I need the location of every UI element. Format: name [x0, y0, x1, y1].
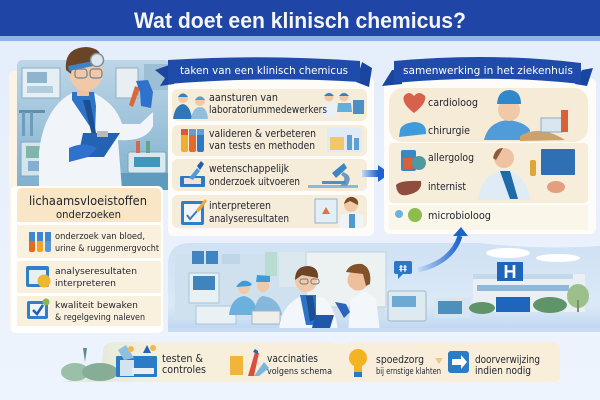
- icon: liver: [396, 181, 421, 195]
- icon: team left: [173, 93, 208, 119]
- icon: quality checkbox: [27, 298, 50, 319]
- panel: taken van een klinisch chemicus: [155, 57, 374, 236]
- row: microbioloog: microbioloog: [428, 210, 491, 222]
- icon: lab analyser: [388, 291, 470, 321]
- title banner: [0, 0, 600, 41]
- icon: checklist clipboard: [181, 199, 207, 225]
- item: testen en controles: testen &: [162, 353, 203, 365]
- heading: lichaamsvloeistoffen onderzoeken: [11, 186, 163, 333]
- row: microbioloog: [389, 205, 588, 230]
- row: aansturen: aansturen van: [209, 92, 278, 104]
- icon: surgeon: [484, 90, 568, 141]
- ribbon heading: samenwerking in het ziekenhuis: [403, 64, 573, 77]
- row: interpreteren: analyseresultaten: [209, 213, 289, 225]
- item: spoedzorg: bij ernstige klahten: [376, 367, 441, 377]
- icon: surgical cap: [399, 122, 426, 137]
- section: allergoloog and internist: internist: [428, 181, 466, 193]
- row: kwaliteit bewaken: & regelgeving naleven: [55, 313, 145, 323]
- item: testen en controles: controles: [162, 364, 206, 376]
- icon: pipette and slide: [180, 161, 205, 187]
- icon: small down marker: [435, 358, 443, 364]
- row: aansturen: laboratoriummedewerkers: [209, 104, 327, 116]
- item: vaccinaties: vaccinaties: [267, 353, 318, 365]
- icon: light bulb: [349, 349, 367, 377]
- icon: team right: [322, 92, 364, 117]
- item: doorverwijzing: [448, 351, 540, 377]
- item: doorverwijzing: indien nodig: [475, 365, 531, 377]
- icon: test tubes: [29, 232, 51, 252]
- row: wetenschappelijk: [172, 159, 367, 191]
- icon: two doctors talking: [279, 264, 380, 332]
- item: vaccinaties: volgens schema: [267, 367, 332, 377]
- ribbon heading: [382, 57, 593, 86]
- arrow: curved to samenwerking: [418, 227, 468, 270]
- row: analyseresultaten interpreteren: interpreteren: [55, 279, 116, 289]
- panel: bottom services bar: [60, 342, 560, 382]
- icon: report with badge: [26, 266, 50, 288]
- section: allergoloog and internist: [389, 143, 588, 203]
- icon: chemist figure: [39, 47, 153, 190]
- panel: hospital scene: [168, 243, 600, 332]
- icon: vaccine and syringe: [230, 349, 269, 376]
- row: interpreteren: interpreteren: [209, 200, 271, 212]
- heading: lichaamsvloeistoffen onderzoeken: onderzoeken: [56, 209, 121, 221]
- icon: validation chart: [327, 128, 362, 152]
- lab shelves and equipment: [175, 251, 386, 324]
- icon: plants: [61, 348, 118, 381]
- ribbon heading: taken van een klinisch chemicus: [180, 64, 348, 77]
- arrow: taken to samenwerking: [362, 165, 390, 182]
- panel: clinical chemist and body fluids: [9, 47, 170, 333]
- title banner: Wat doet een klinisch chemicus?: [134, 8, 466, 33]
- section: allergoloog and internist: allergolog: [428, 152, 474, 164]
- row: valideren: van tests en methoden: [209, 140, 315, 152]
- row: valideren: valideren & verbeteren: [209, 128, 316, 140]
- row: wetenschappelijk: onderzoek uitvoeren: [209, 176, 300, 188]
- item: doorverwijzing: doorverwijzing: [475, 354, 540, 366]
- row: valideren: [172, 125, 367, 156]
- row: onderzoek van bloed: [17, 225, 161, 258]
- row: aansturen: [172, 89, 367, 121]
- icon: speech badge: ‡‡: [399, 264, 407, 273]
- item: testen en controles: [116, 345, 206, 377]
- icon: internist: [478, 148, 575, 200]
- icon: speech badge: [394, 261, 412, 279]
- lab background equipment: [19, 64, 168, 190]
- row: interpreteren: [172, 195, 367, 228]
- ribbon heading: [155, 57, 372, 87]
- item: spoedzorg: spoedzorg: [376, 354, 424, 366]
- row: kwaliteit bewaken: [17, 296, 161, 326]
- section: cardioloog and chirurgie: cardioloog: [428, 97, 478, 109]
- row: onderzoek van bloed: urine & ruggenmergvocht: [55, 244, 159, 254]
- row: analyseresultaten interpreteren: [17, 261, 161, 293]
- row: onderzoek van bloed: onderzoek van bloed,: [55, 232, 145, 242]
- icon: microscope: [308, 163, 358, 188]
- row: analyseresultaten interpreteren: analyseresultaten: [55, 267, 137, 277]
- icon: hospital building: H: [504, 262, 516, 282]
- icon: hospital building: [469, 248, 589, 314]
- item: vaccinaties: [230, 349, 332, 377]
- section: cardioloog and chirurgie: chirurgie: [428, 125, 470, 137]
- icon: coloured tubes: [181, 129, 204, 152]
- icon: allergen jar: [401, 150, 426, 171]
- icon: scientist reading results: [315, 197, 364, 228]
- icon: two lab technicians: [229, 275, 282, 324]
- row: kwaliteit bewaken: kwaliteit bewaken: [55, 301, 138, 311]
- item: spoedzorg: [349, 349, 443, 377]
- panel: samenwerking in het ziekenhuis: [382, 57, 596, 234]
- row: wetenschappelijk: wetenschappelijk: [209, 163, 289, 175]
- icon: heart: [403, 93, 425, 113]
- icon: microbes: [395, 208, 422, 222]
- icon: test kit: [116, 345, 157, 377]
- icon: referral arrow: [448, 351, 469, 373]
- section: cardioloog and chirurgie: [389, 88, 588, 142]
- heading: lichaamsvloeistoffen onderzoeken: lichaamsvloeistoffen: [29, 194, 147, 208]
